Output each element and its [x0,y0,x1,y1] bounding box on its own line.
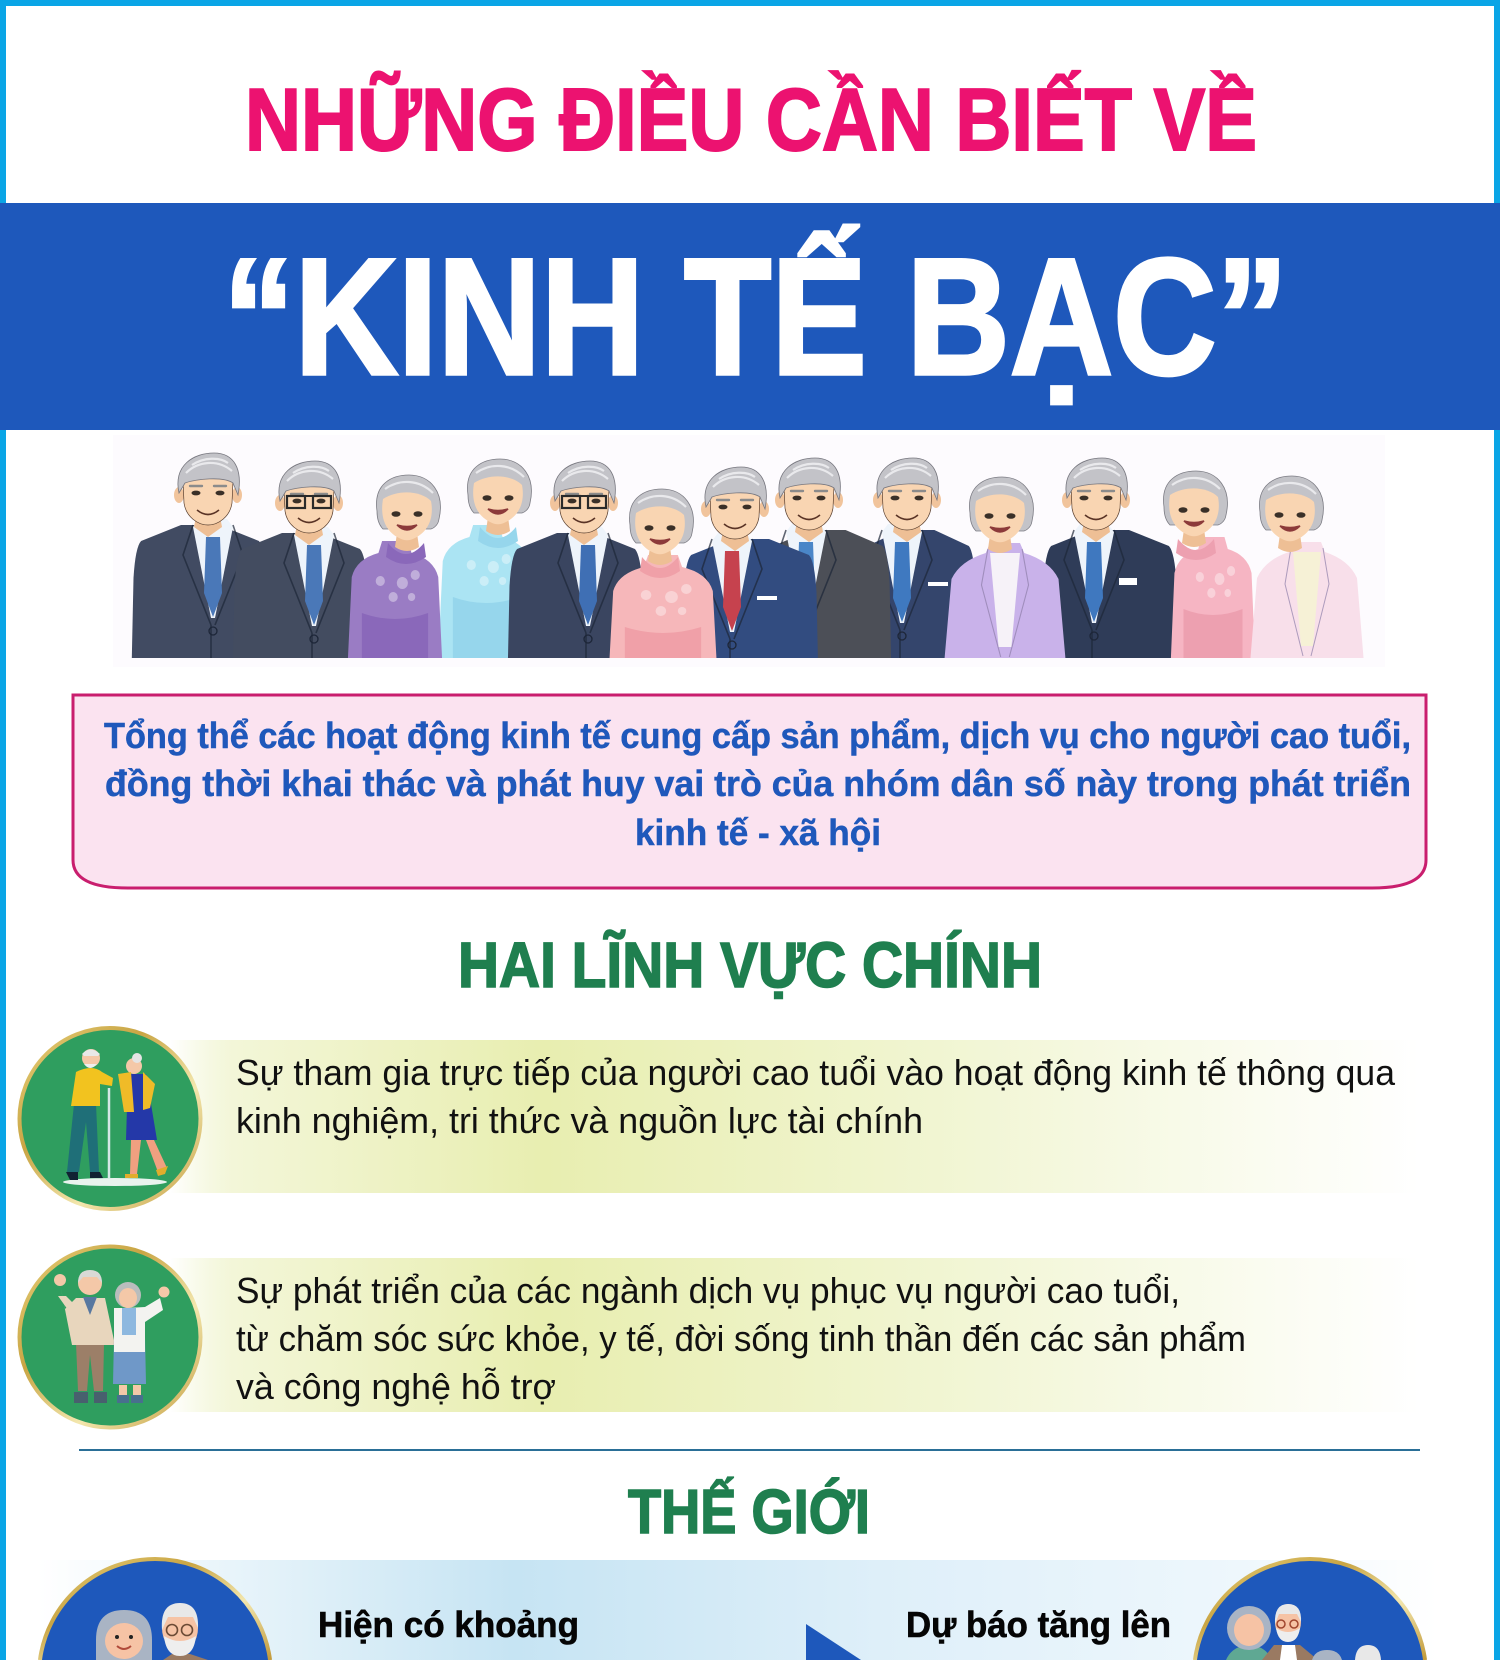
person: woman in pale pink blazer [1250,476,1364,658]
person: man in dark navy suit [1045,458,1176,658]
row: direct participation [20,1028,1420,1209]
person: woman in pink dress, right [1163,471,1256,671]
heading: những điều cần biết về: NHỮNG ĐIỀU CẦN BIẾT VỀ [245,70,1257,169]
text: dự báo tăng lên: Dự báo tăng lên [906,1604,1171,1645]
person: woman in pink dress [610,488,716,658]
person: man with glasses [235,460,364,658]
person: man in blue suit with red tie [686,466,818,658]
person: man in navy suit [873,458,973,658]
panel: definition [73,695,1426,888]
row: services for the elderly [20,1246,1420,1428]
heading: thế giới: THẾ GIỚI [628,1478,870,1547]
icon: elderly couple [40,1559,270,1660]
illustration: group of elderly people [132,452,1364,658]
arrow [806,1624,861,1660]
person: man in grey suit [775,458,891,658]
row text line 1: Sự tham gia trực tiếp của người cao tuổi vào hoạt động kinh tế thông qua [236,1052,1396,1093]
person: woman in lilac blazer [944,476,1066,658]
row text line 3: và công nghệ hỗ trợ [236,1366,556,1407]
heading: hai lĩnh vực chính: HAI LĨNH VỰC CHÍNH [458,929,1042,1001]
text: hiện có khoảng: Hiện có khoảng [318,1604,579,1645]
person: man with glasses and dark suit [508,460,640,658]
definition line 3: kinh tế - xã hội [635,812,881,853]
icon: elderly couple singing [20,1028,200,1209]
title banner [0,203,1500,430]
definition line 2: đồng thời khai thác và phát huy vai trò của nhóm dân số này trong phát triển [105,763,1411,804]
person: woman in light blue dress [438,459,534,659]
definition line 1: Tổng thể các hoạt động kinh tế cung cấp sản phẩm, dịch vụ cho người cao tuổi, [104,715,1411,756]
icon: elderly family [1195,1559,1425,1660]
row text line 2: kinh nghiệm, tri thức và nguồn lực tài chính [236,1100,923,1141]
person: man in dark suit [132,452,260,658]
divider [79,1449,1420,1451]
title: kinh tế bạc: “KINH TẾ BẠC” [223,225,1288,410]
person: woman in purple dress [347,475,443,675]
row text line 1: Sự phát triển của các ngành dịch vụ phục vụ người cao tuổi, [236,1270,1180,1311]
row text line 2: từ chăm sóc sức khỏe, y tế, đời sống tinh thần đến các sản phẩm [236,1318,1246,1359]
icon: elderly couple waving [20,1246,200,1428]
panel: world figures [38,1559,1438,1660]
